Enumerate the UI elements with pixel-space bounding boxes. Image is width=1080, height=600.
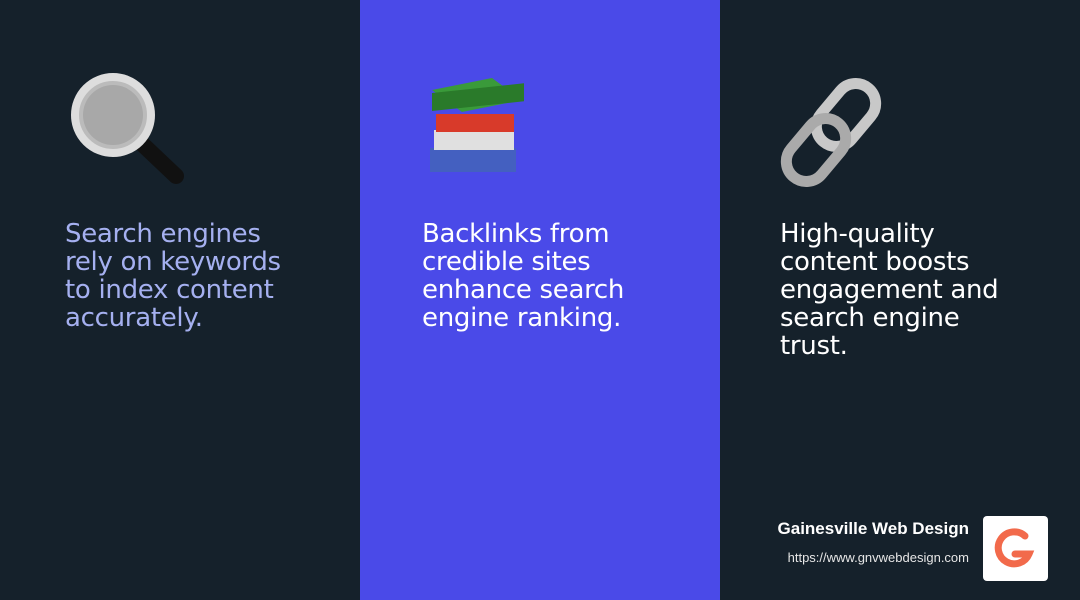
text: keywords: to index content <box>65 275 274 305</box>
text: backlinks: credible sites <box>422 247 590 277</box>
text: backlinks: Backlinks from <box>422 219 609 249</box>
panel: content <box>720 0 1080 600</box>
text: content: trust. <box>780 331 848 361</box>
text: backlinks <box>422 219 624 333</box>
text: content: High-quality <box>780 219 934 249</box>
text: backlinks: engine ranking. <box>422 303 621 333</box>
text: keywords: accurately. <box>65 303 203 333</box>
branding <box>778 516 1048 581</box>
panel: backlinks <box>360 0 720 600</box>
text: keywords: Search engines <box>65 219 261 249</box>
brand url: https://www.gnvwebdesign.com <box>788 550 969 565</box>
logo <box>983 516 1048 581</box>
text: backlinks: enhance search <box>422 275 624 305</box>
text: content: search engine <box>780 303 959 333</box>
icon: chain link <box>780 78 882 187</box>
icon: magnifying glass <box>71 73 184 184</box>
text: keywords <box>65 219 281 333</box>
text: content: engagement and <box>780 275 998 305</box>
text: content: content boosts <box>780 247 969 277</box>
text: keywords: rely on keywords <box>65 247 281 277</box>
panel: keywords <box>0 0 360 600</box>
icon: books <box>430 78 524 172</box>
brand name: Gainesville Web Design <box>778 519 969 538</box>
text: content <box>780 219 998 361</box>
